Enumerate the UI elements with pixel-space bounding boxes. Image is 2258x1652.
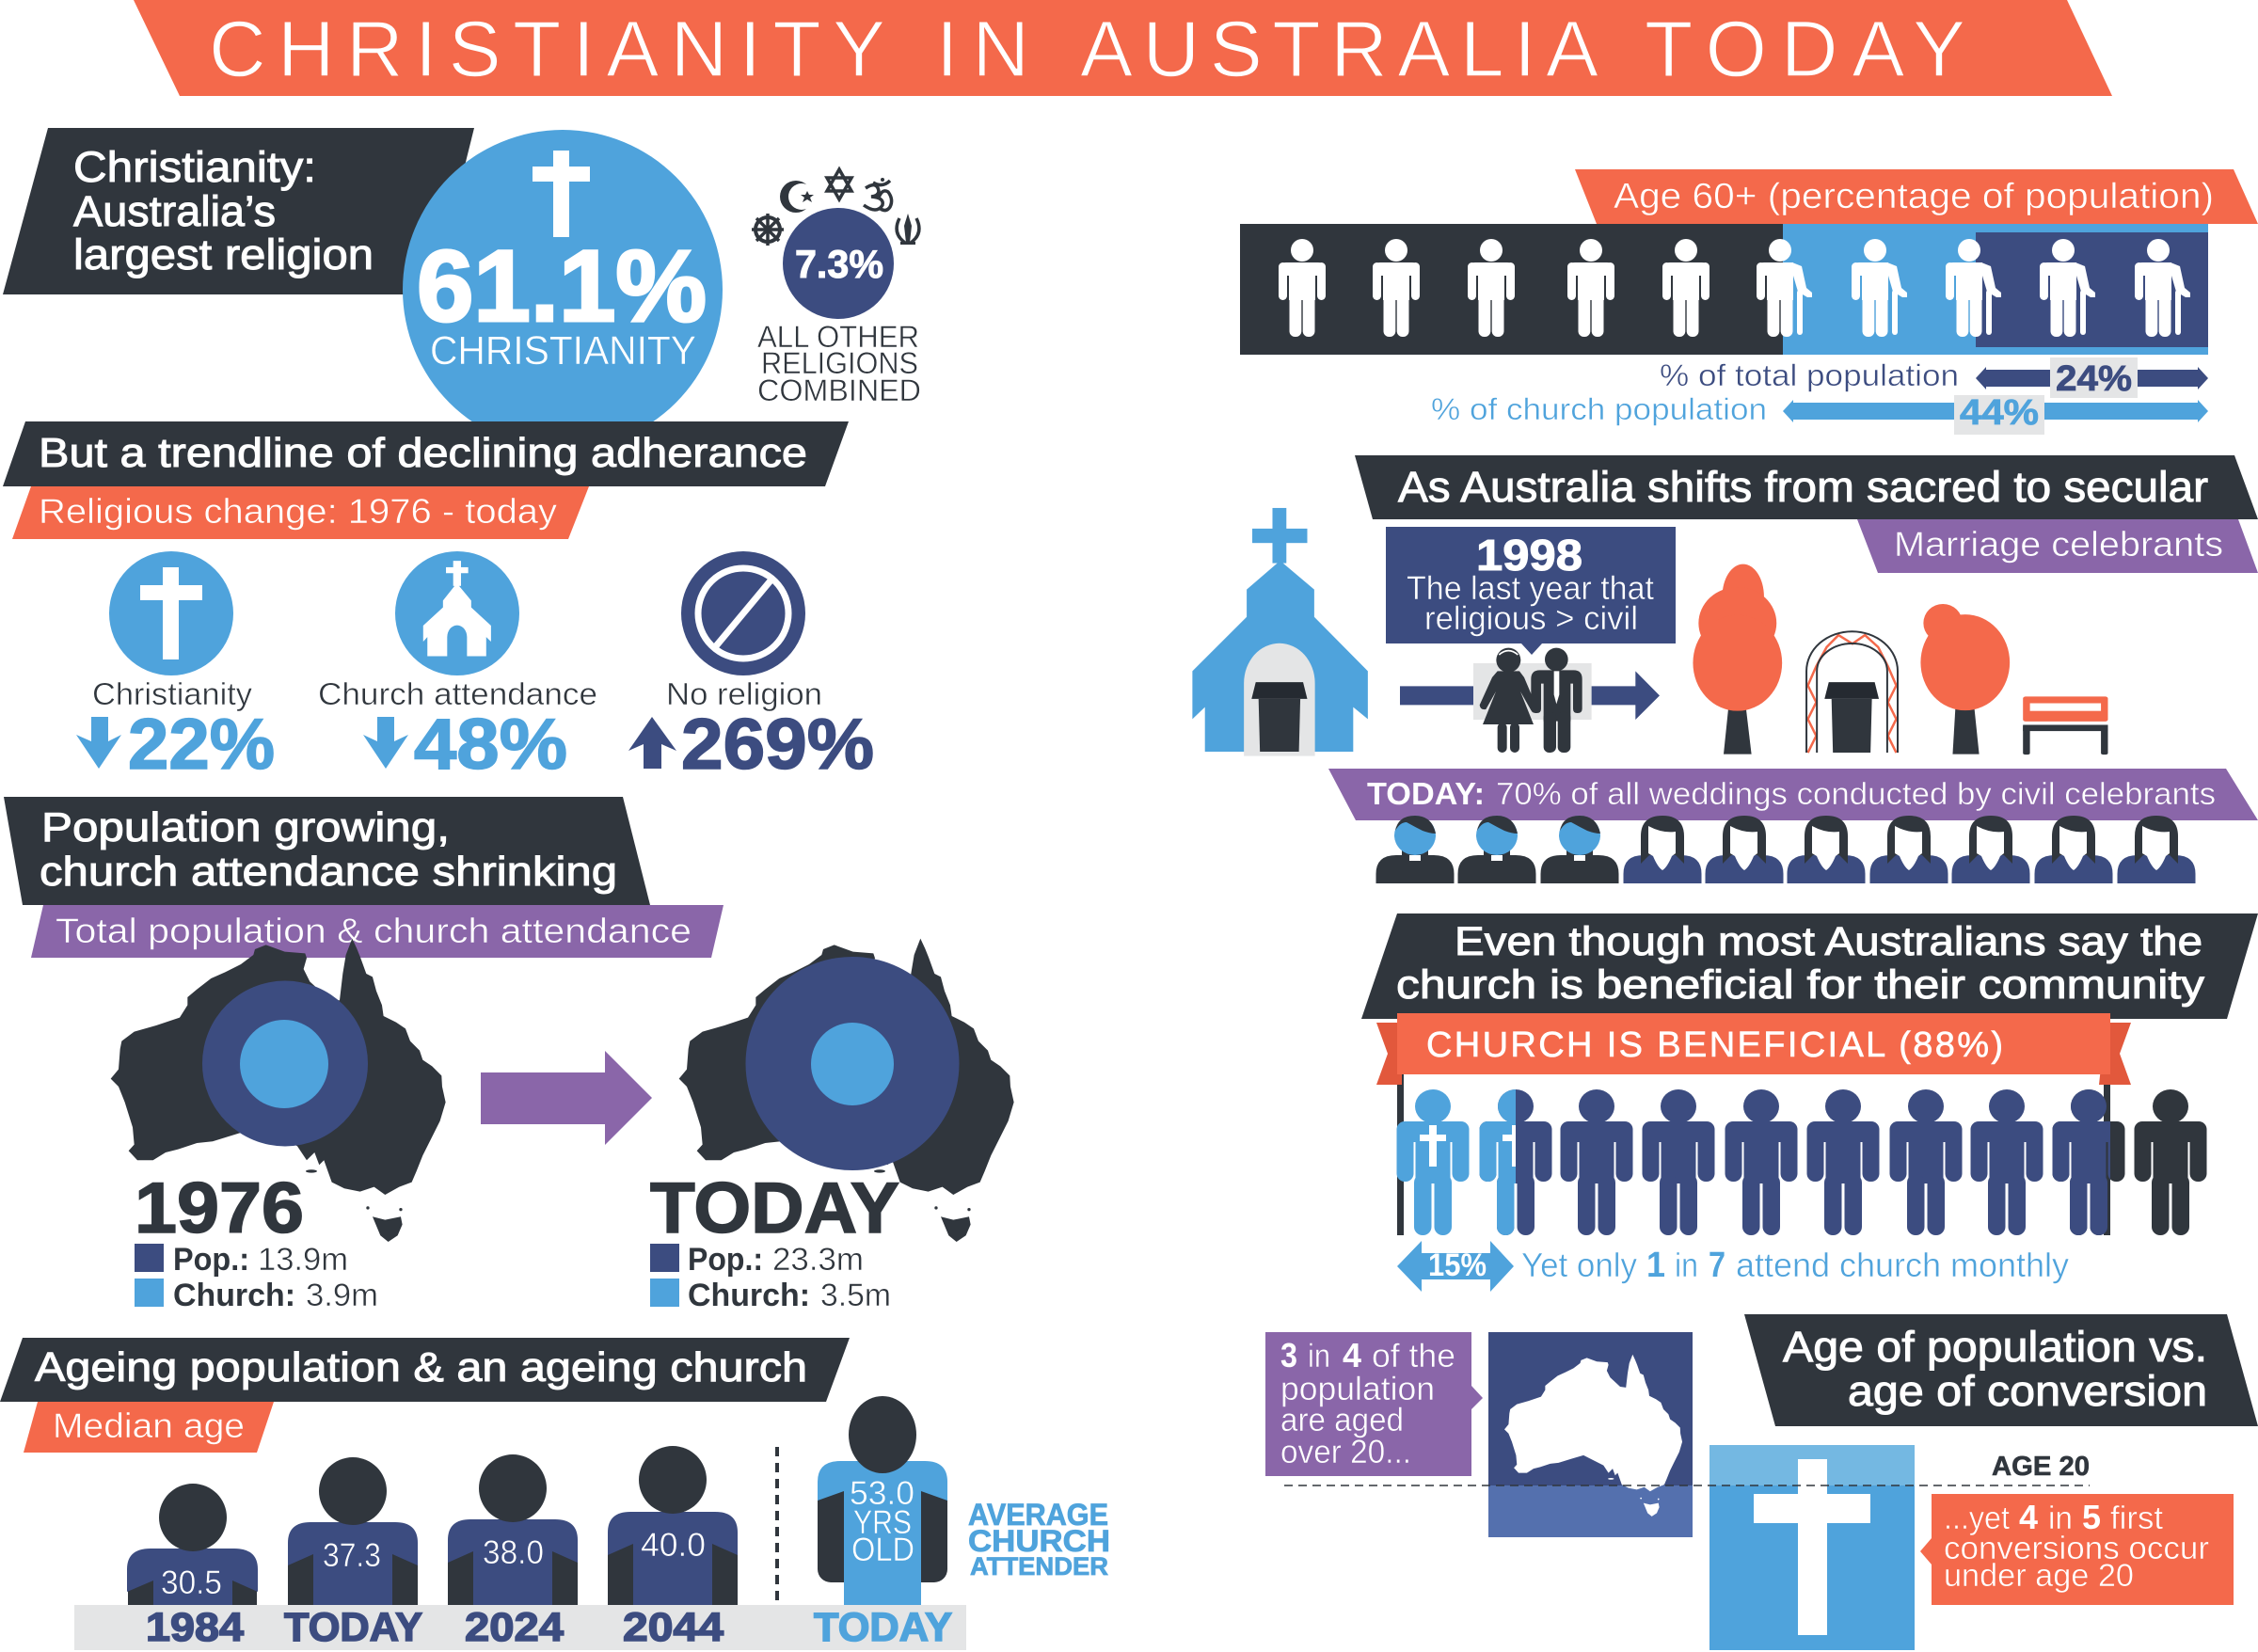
heading: population growing bbox=[4, 797, 650, 905]
icon: church bbox=[1192, 508, 1368, 756]
subheading: age 60+ bbox=[1575, 169, 2258, 224]
callout: 3 in 4: 4 bbox=[1343, 1336, 1361, 1374]
heading: ageing population: Ageing population & an ageing church bbox=[35, 1344, 807, 1390]
heading: sacred to secular: As Australia shifts from sacred to secular bbox=[1398, 463, 2208, 511]
icon: tree bbox=[1693, 564, 1782, 755]
subheading: religious change: Religious change: 1976 - today bbox=[39, 492, 558, 531]
chart: religious vs civil celebrants bbox=[1375, 816, 2196, 883]
heading: church beneficial: church is beneficial for their community bbox=[1396, 962, 2205, 1008]
callout: 4 in 5: under age 20 bbox=[1944, 1558, 2134, 1594]
stat: 44% of church population: % of church population bbox=[1431, 392, 1767, 426]
subheading: total population bbox=[31, 905, 724, 958]
stat: no religion up 269% bbox=[628, 551, 874, 785]
stat: Christianity down 22%: Christianity bbox=[92, 676, 253, 711]
title banner: IN bbox=[936, 5, 1029, 93]
heading: Christianity largest religion: largest religion bbox=[73, 230, 374, 278]
stat: Christianity down 22% bbox=[76, 551, 275, 785]
callout: 4 in 5: conversions occur bbox=[1944, 1531, 2209, 1566]
callout: 1998 bbox=[1386, 527, 1676, 655]
chart: age 60+ people bar bbox=[1240, 224, 2208, 355]
callout: 3 in 4: 3 bbox=[1280, 1336, 1297, 1374]
big circle: 61.1% Christianity: CHRISTIANITY bbox=[430, 328, 696, 373]
subheading: marriage celebrants: Marriage celebrants bbox=[1894, 525, 2223, 564]
heading: church beneficial: Even though most Australians say the bbox=[1455, 919, 2202, 964]
figure: average church attender: AVERAGE bbox=[968, 1498, 1108, 1532]
stat: church attendance down 48% bbox=[318, 551, 597, 785]
figure: average church attender: YRS bbox=[853, 1504, 912, 1541]
figure: average church attender: ATTENDER bbox=[970, 1552, 1108, 1581]
other religions circle: RELIGIONS bbox=[761, 346, 918, 380]
heading: age of conversion bbox=[1744, 1314, 2258, 1426]
subheading: median age: Median age bbox=[53, 1406, 245, 1445]
stat: 15% attend monthly: in bbox=[1675, 1246, 1698, 1284]
figure: 1984 median age: 30.5 bbox=[161, 1565, 222, 1601]
map: today: 23.3m bbox=[772, 1242, 864, 1278]
stat: no religion up 269%: 269% bbox=[681, 705, 874, 785]
other religions circle bbox=[757, 208, 921, 407]
poles bbox=[1397, 1074, 2110, 1235]
figure: average church attender bbox=[814, 1396, 1110, 1650]
heading: trendline of declining adherance: But a trendline of declining adherance bbox=[39, 430, 807, 476]
figure: 2044 median age bbox=[608, 1446, 738, 1650]
map: 1976: 3.9m bbox=[306, 1278, 378, 1313]
stat: church attendance down 48%: Church attendance bbox=[318, 676, 597, 711]
title banner: TODAY bbox=[1645, 5, 1965, 93]
heading: population growing: Population growing, bbox=[41, 804, 450, 850]
callout: 3 in 4: of the bbox=[1372, 1338, 1455, 1374]
figure: today median age bbox=[284, 1457, 422, 1650]
callout: 4 in 5 bbox=[1920, 1494, 2234, 1605]
banner: today weddings bbox=[1328, 769, 2258, 820]
map: 1976: 13.9m bbox=[258, 1242, 348, 1278]
callout: 3 in 4: population bbox=[1280, 1371, 1435, 1407]
stat: 24% of total population bbox=[1660, 357, 2208, 399]
icon: bench bbox=[2023, 696, 2107, 755]
map: 1976: 1976 bbox=[135, 1168, 304, 1248]
icon: second tree bbox=[1920, 604, 2010, 755]
heading: church beneficial bbox=[1361, 913, 2258, 1019]
panel: population map bbox=[1488, 1332, 1693, 1537]
heading: age of conversion: Age of population vs. bbox=[1783, 1323, 2207, 1371]
figure: 2024 median age: 38.0 bbox=[483, 1534, 544, 1571]
callout: 1998: The last year that bbox=[1407, 570, 1654, 607]
ribbon: church is beneficial bbox=[1376, 1013, 2131, 1085]
figure: average church attender: CHURCH bbox=[968, 1524, 1110, 1558]
ribbon: church is beneficial: CHURCH IS BENEFICIAL (88%) bbox=[1426, 1025, 2003, 1065]
title banner bbox=[134, 0, 2112, 96]
subheading: age 60+: Age 60+ (percentage of population) bbox=[1614, 177, 2214, 216]
heading: sacred to secular bbox=[1355, 455, 2258, 519]
callout: 1998: religious > civil bbox=[1424, 600, 1638, 637]
figure: 2044 median age: 40.0 bbox=[641, 1527, 706, 1564]
heading: Christianity largest religion: Christianity: bbox=[73, 143, 316, 191]
heading: Christianity largest religion bbox=[3, 128, 474, 294]
figure: average church attender: OLD bbox=[851, 1532, 914, 1568]
callout: 1998: 1998 bbox=[1476, 531, 1582, 580]
heading: population growing: church attendance shrinking bbox=[40, 849, 617, 895]
map: today: TODAY bbox=[650, 1168, 899, 1248]
stat: 15% attend monthly: attend church monthly bbox=[1736, 1246, 2069, 1284]
stat: 44% of church population: 44% bbox=[1960, 393, 2039, 433]
figure: 2044 median age: 2044 bbox=[623, 1605, 724, 1650]
figure: 2024 median age: 2024 bbox=[465, 1605, 564, 1650]
arrow: 1976 to today bbox=[481, 1051, 652, 1145]
figure: 1984 median age: 1984 bbox=[146, 1605, 244, 1650]
map: 1976: Pop.: bbox=[173, 1242, 249, 1278]
stat: 15% attend monthly: 15% bbox=[1428, 1247, 1487, 1283]
stat: no religion up 269%: No religion bbox=[666, 676, 822, 711]
figure: 1984 median age bbox=[127, 1484, 258, 1650]
heading: age of conversion: age of conversion bbox=[1848, 1367, 2207, 1415]
big circle: 61.1% Christianity: 61.1% bbox=[417, 229, 707, 342]
figure: average church attender: 53.0 bbox=[850, 1475, 914, 1512]
title banner: AUSTRALIA bbox=[1080, 5, 1598, 93]
callout: 4 in 5: 4 bbox=[2019, 1498, 2038, 1536]
map: today: Pop.: bbox=[688, 1242, 763, 1278]
other religions circle: COMBINED bbox=[757, 373, 921, 407]
stat: 24% of total population: 24% bbox=[2056, 359, 2132, 399]
stat: 24% of total population: % of total population bbox=[1660, 358, 1959, 392]
map: today: 3.5m bbox=[820, 1278, 891, 1313]
grey year band bbox=[74, 1605, 966, 1650]
big circle: 61.1% Christianity bbox=[403, 130, 723, 450]
icon: religion symbols bbox=[752, 169, 919, 246]
figure: today median age: TODAY bbox=[284, 1605, 422, 1650]
callout: 4 in 5: first bbox=[2110, 1501, 2164, 1536]
panel: conversion cross bbox=[1709, 1445, 1915, 1650]
callout: 4 in 5: in bbox=[2048, 1501, 2073, 1536]
heading: Christianity largest religion: Australia’s bbox=[73, 187, 276, 235]
subheading: marriage celebrants bbox=[1857, 519, 2258, 573]
heading: ageing population bbox=[0, 1338, 850, 1402]
icon: wedding arch bbox=[1806, 631, 1898, 753]
label: age 20: AGE 20 bbox=[1992, 1452, 2090, 1482]
stat: Christianity down 22%: 22% bbox=[128, 705, 275, 785]
stat: 15% attend monthly: 7 bbox=[1709, 1246, 1725, 1285]
callout: 3 in 4: are aged bbox=[1280, 1402, 1404, 1438]
stat: 15% attend monthly bbox=[1397, 1241, 2069, 1292]
figure: 2024 median age bbox=[448, 1454, 578, 1650]
banner: today weddings: 70% of all weddings conducted by civil celebrants bbox=[1496, 776, 2216, 811]
subheading: total population: Total population & church attendance bbox=[56, 912, 692, 950]
callout: 4 in 5: ...yet bbox=[1944, 1501, 2011, 1536]
other religions circle: 7.3% bbox=[795, 242, 883, 286]
subheading: median age bbox=[24, 1402, 274, 1453]
stat: 15% attend monthly: Yet only bbox=[1521, 1246, 1637, 1284]
map: 1976 bbox=[111, 939, 446, 1313]
figure: average church attender: TODAY bbox=[814, 1605, 952, 1650]
map: today: Church: bbox=[688, 1278, 810, 1313]
other religions circle: ALL OTHER bbox=[757, 320, 919, 354]
subheading: religious change bbox=[12, 486, 589, 539]
stat: 44% of church population bbox=[1431, 392, 2208, 435]
callout: 4 in 5: 5 bbox=[2082, 1498, 2101, 1536]
stat: 15% attend monthly: 1 bbox=[1646, 1246, 1665, 1285]
map: 1976: Church: bbox=[173, 1278, 295, 1313]
chart: people row, 88% beneficial bbox=[1396, 1089, 2207, 1235]
map: today bbox=[650, 939, 1014, 1313]
arrow with couple bbox=[1400, 648, 1660, 753]
stat: church attendance down 48%: 48% bbox=[414, 705, 567, 785]
banner: today weddings: TODAY: bbox=[1367, 776, 1485, 811]
callout: 3 in 4: in bbox=[1308, 1338, 1330, 1374]
callout: 3 in 4 bbox=[1265, 1332, 1483, 1476]
figure: today median age: 37.3 bbox=[323, 1537, 381, 1574]
title banner: CHRISTIANITY bbox=[209, 5, 885, 93]
heading: trendline of declining adherance bbox=[3, 421, 849, 486]
callout: 3 in 4: over 20... bbox=[1280, 1434, 1411, 1470]
